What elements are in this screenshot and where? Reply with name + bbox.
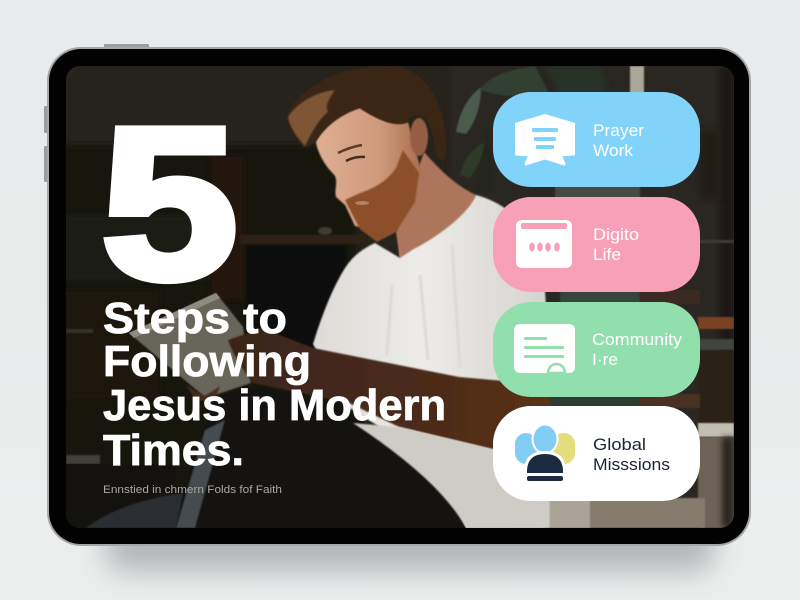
label: Global bbox=[593, 436, 646, 454]
lower fingers bbox=[186, 385, 220, 402]
icon: speech bubble bbox=[516, 116, 574, 164]
trouser highlight bbox=[176, 420, 225, 528]
beard bbox=[345, 150, 419, 242]
tablet side buttons bbox=[44, 44, 149, 182]
title: Times. bbox=[103, 426, 244, 475]
card: Global Missions bbox=[493, 406, 700, 501]
icon: note card bbox=[514, 324, 575, 373]
face bbox=[316, 108, 421, 232]
icon: calendar bbox=[516, 220, 572, 268]
shirt folds bbox=[387, 245, 460, 368]
title: Following bbox=[103, 337, 311, 386]
eye and brow bbox=[338, 145, 365, 161]
background shelves bbox=[66, 144, 358, 494]
label: Work bbox=[593, 142, 634, 160]
hair bbox=[287, 66, 446, 162]
tablet device bbox=[44, 44, 751, 546]
subtitle: Ennstied in chmern Folds fof Faith bbox=[103, 484, 282, 496]
label: I·re bbox=[592, 351, 618, 369]
window and shelves right bbox=[560, 292, 640, 302]
card: Digito Life bbox=[493, 197, 700, 292]
label: Life bbox=[593, 246, 621, 264]
arm and hand bbox=[228, 328, 550, 450]
lower shirt bbox=[353, 423, 550, 528]
big number 5: 5 bbox=[101, 83, 238, 325]
lip bbox=[355, 201, 369, 205]
title: Steps to bbox=[103, 294, 287, 343]
book in hands bbox=[129, 293, 251, 398]
dark trousers bbox=[354, 416, 466, 528]
tablet frame bbox=[47, 47, 751, 546]
plant leaves bbox=[456, 66, 640, 200]
couch right bbox=[698, 423, 734, 437]
label bbox=[593, 226, 639, 264]
tablet drop shadow bbox=[105, 520, 715, 572]
title bbox=[103, 294, 446, 475]
label: Prayer bbox=[593, 122, 645, 140]
neck bbox=[396, 152, 476, 258]
card: Community bbox=[493, 302, 700, 397]
label: Misssions bbox=[593, 456, 670, 474]
background right room bbox=[722, 66, 723, 67]
label bbox=[593, 436, 670, 474]
label bbox=[592, 331, 683, 369]
t-shirt bbox=[313, 195, 550, 528]
title: Jesus in Modern bbox=[103, 381, 446, 430]
ear bbox=[410, 118, 428, 156]
hair highlight bbox=[288, 90, 335, 146]
label bbox=[593, 122, 645, 160]
icon: people group bbox=[515, 424, 575, 481]
label: Community bbox=[592, 331, 683, 349]
label: Digito bbox=[593, 226, 639, 244]
screen photo: man reading bbox=[60, 60, 740, 535]
card: Prayer Work bbox=[493, 92, 700, 187]
